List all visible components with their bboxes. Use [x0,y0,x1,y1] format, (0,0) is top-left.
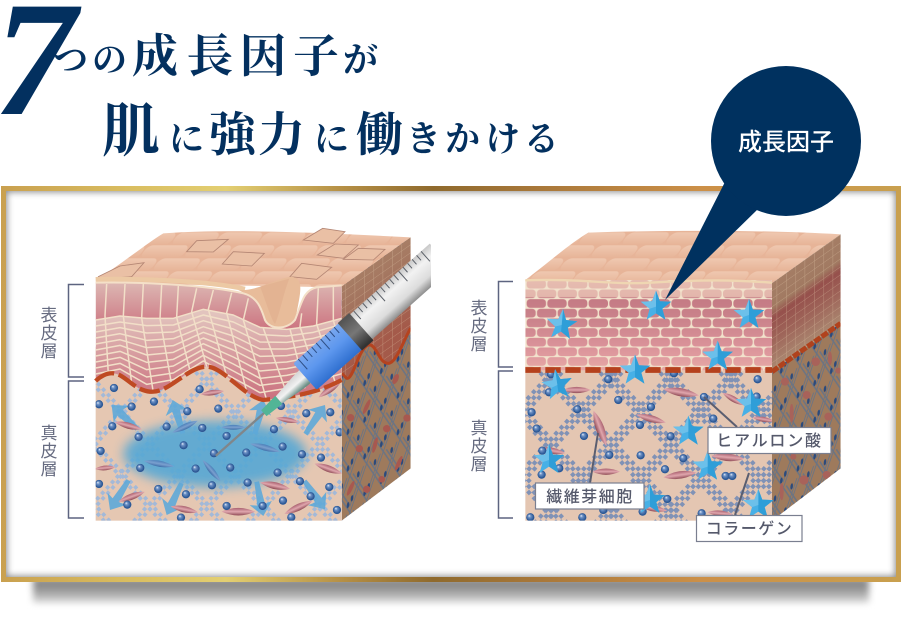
left label: 真皮層: 真 [40,424,58,443]
left label: 表皮層: 層 [40,342,58,361]
surface line [96,282,342,327]
label: 繊維芽細胞: 繊維芽細胞 [546,488,634,506]
label: ヒアルロン酸: ヒアルロン酸 [716,432,823,450]
label: 繊維芽細胞 [536,483,644,509]
leader: 繊維芽細胞 [590,433,598,483]
right cube side face [772,233,842,523]
left cube dermis [96,346,342,521]
title line 2: に [169,120,204,159]
left label: 真皮層: 層 [40,460,58,479]
callout bubble: 成長因子: 成長因子 [738,129,834,156]
label: ヒアルロン酸 [708,428,831,454]
right label: 表皮層: 皮 [470,317,488,336]
left label: 表皮層: 表 [40,306,58,325]
leader: コラーゲン [735,473,749,515]
skin crease [238,277,300,328]
right label: 表皮層: 表 [470,299,488,318]
hyaluronic beads [526,369,762,521]
hyaluronic beads [95,384,344,522]
crease shading [260,279,289,324]
basement membrane [525,361,772,378]
title line 1: 成 [132,31,178,82]
collagen net [96,371,342,521]
gold frame panel [1,186,901,582]
title line 1: 子 [293,31,339,82]
left label: 真皮層: 皮 [40,442,58,461]
callout bubble: 成長因子 [665,66,861,300]
fibroblasts [537,385,775,517]
title line 1: が [343,41,378,80]
left cube side face [342,237,412,523]
right label: 真皮層: 層 [470,455,488,474]
right brackets [498,282,513,518]
nozzle [276,370,311,404]
right label: 真皮層: 真 [470,419,488,438]
left brackets [68,284,84,518]
stratum corneum band [96,279,245,289]
right cube dermis [525,346,772,521]
title line 1: 長 [187,31,233,82]
left label: 表皮層 [40,306,58,361]
spreading arrows [100,397,334,520]
right skin cube [414,231,868,523]
title line 2: 肌 [102,99,160,164]
right cube top surface [525,231,841,283]
left cube epidermis [96,277,342,403]
dark ring [338,313,374,351]
title line 1: の [92,41,127,80]
blue ticks [298,327,343,369]
title line 1: 因 [240,31,286,82]
title line 2: き [406,120,441,159]
label: コラーゲン: コラーゲン [706,520,793,538]
label: コラーゲン [696,516,802,542]
left cube top surface [96,228,411,287]
needle hub [260,396,282,417]
title line 2: 強 [209,110,260,162]
title line 2: か [445,120,480,159]
title line 1: つ [53,41,88,80]
needle [215,411,266,457]
surface line [525,280,772,283]
frame drop shadow [33,578,869,603]
left label: 表皮層: 皮 [40,324,58,343]
left label: 真皮層 [40,424,58,479]
title line 2: け [485,120,520,159]
title [0,0,559,164]
title line 2: 力 [258,110,305,162]
collagen net [525,370,772,521]
clear barrel [350,244,431,339]
right label: 表皮層 [470,299,488,354]
blue liquid barrel [293,323,362,390]
title line 2: る [524,120,559,159]
title line 2: に [314,120,349,159]
barrel ticks [354,251,430,321]
fibroblasts [94,379,343,517]
leader: ヒアルロン酸 [704,397,737,427]
growth factor stars [534,291,774,518]
syringe [215,244,431,457]
left skin cube [0,228,453,523]
title line 2: 働 [356,110,403,162]
basement membrane [96,367,342,400]
right cube epidermis [525,280,772,371]
right label: 真皮層 [470,419,488,474]
right label: 表皮層: 層 [470,335,488,354]
growth factor blue pool [123,421,307,487]
right label: 真皮層: 皮 [470,437,488,456]
